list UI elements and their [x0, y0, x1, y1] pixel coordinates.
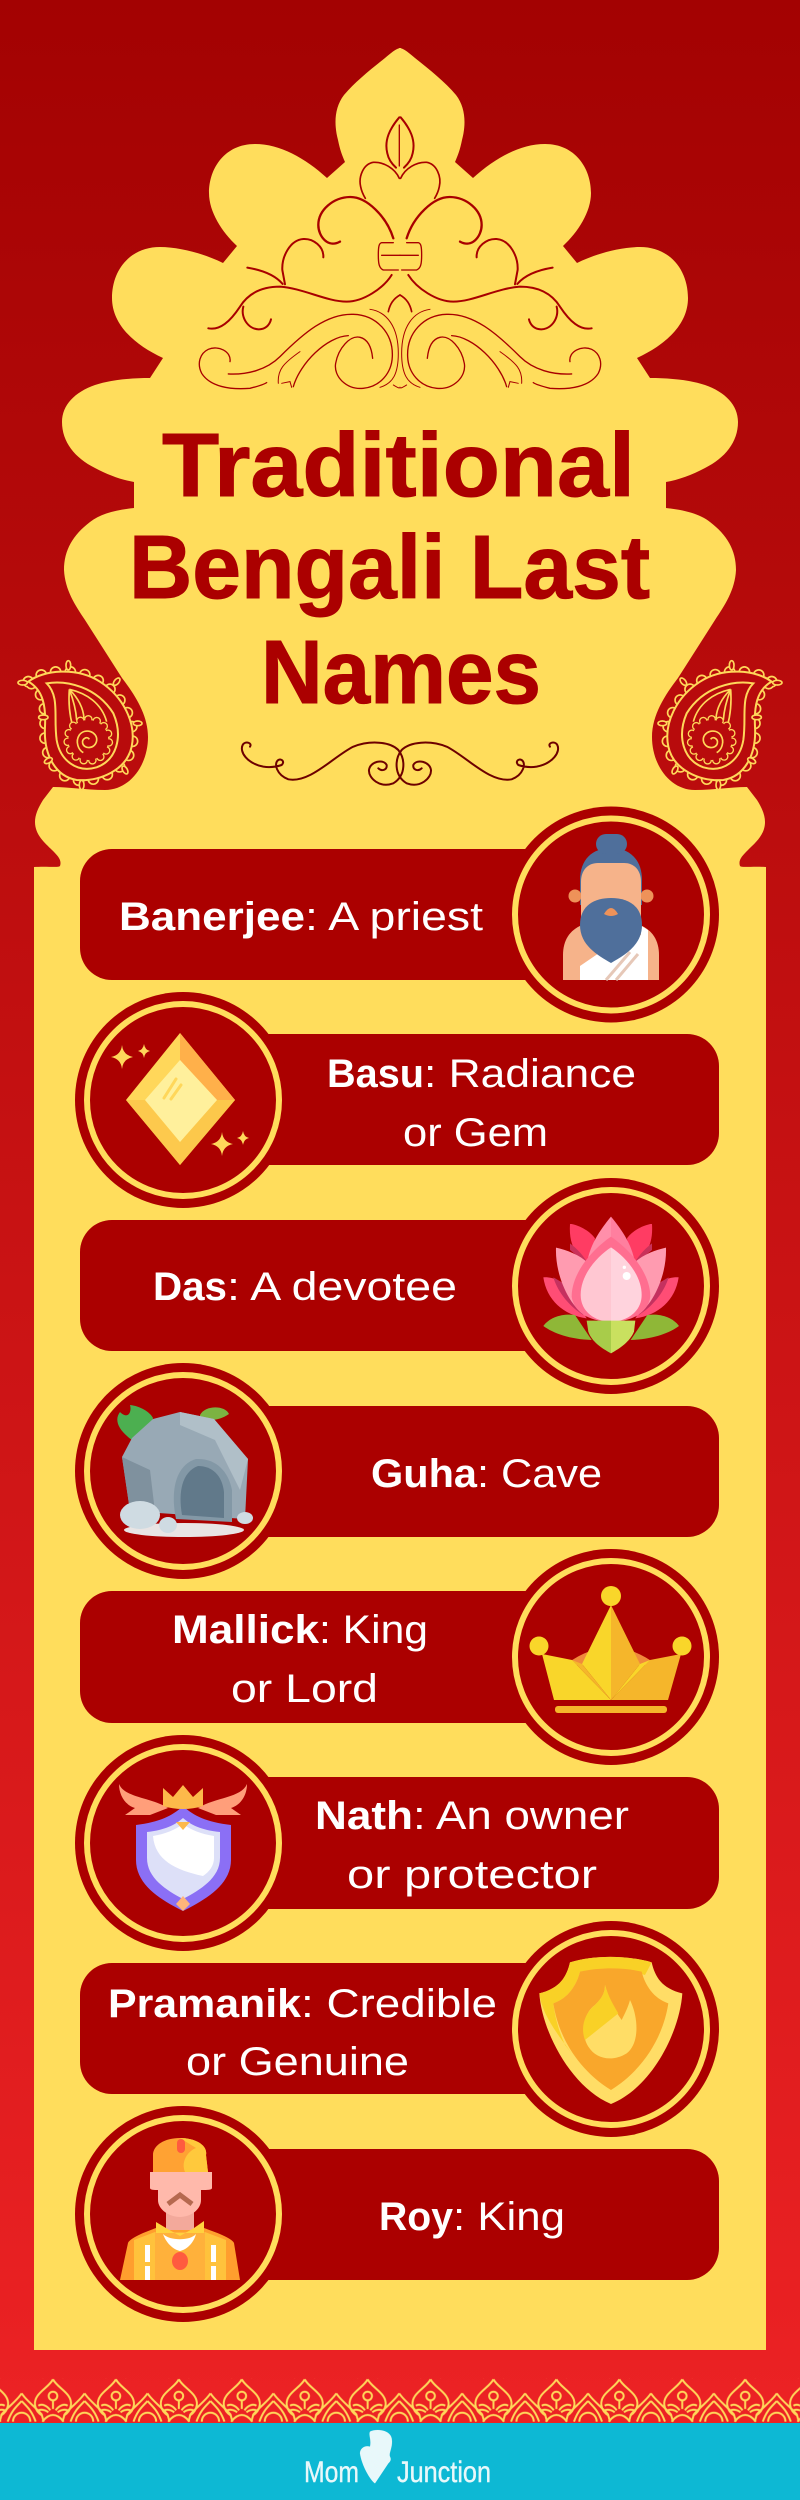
icon: king: [120, 2138, 240, 2280]
row: Pramanik: [80, 1921, 719, 2137]
text: : A devotee: [227, 1265, 457, 1309]
text: Basu: [327, 1052, 424, 1096]
text: or protector: [347, 1853, 597, 1897]
ornament: paisley left: [18, 661, 142, 790]
title: Traditional: [162, 416, 635, 516]
pill: [220, 1034, 719, 1165]
row: Guha: [75, 1363, 719, 1579]
text: [327, 1052, 636, 1155]
medallion: [503, 1921, 719, 2137]
text: Das: [153, 1265, 227, 1309]
ornament: title divider flourish: [242, 743, 558, 785]
text: Pramanik: [108, 1982, 302, 2026]
text: [371, 1452, 602, 1496]
text: Nath: [315, 1794, 413, 1838]
icon: shield with wings: [119, 1784, 247, 1911]
text: : King: [319, 1608, 428, 1652]
icon: crown: [530, 1586, 692, 1713]
footer band: [0, 2423, 800, 2500]
text: : King: [453, 2195, 565, 2239]
icon: priest: [563, 834, 659, 980]
text: [108, 1982, 497, 2084]
ornament: paisley right: [658, 661, 782, 790]
text: [153, 1265, 457, 1309]
pill: [80, 1963, 580, 2094]
ornament: top flourish: [199, 117, 601, 389]
text: [119, 895, 483, 939]
medallion: [503, 806, 719, 1022]
text: Banerjee: [119, 895, 305, 939]
text: or Lord: [231, 1667, 378, 1711]
text: or Genuine: [186, 2040, 409, 2084]
logo: MomJunction: Mom: [304, 2456, 359, 2489]
logo: MomJunction: [304, 2430, 491, 2489]
row: Mallick: [80, 1549, 719, 1765]
medallion: [75, 1735, 291, 1951]
text: Roy: [379, 2195, 454, 2239]
row: Nath: [75, 1735, 719, 1951]
row: Banerjee: [80, 806, 719, 1022]
icon: gem: [111, 1033, 249, 1165]
icon: lotus: [543, 1217, 679, 1353]
row: Roy: [75, 2106, 719, 2322]
text: or Gem: [403, 1111, 548, 1155]
pill: [220, 1406, 719, 1537]
text: [172, 1608, 428, 1711]
logo: MomJunction: Junction: [397, 2456, 491, 2489]
text: [379, 2195, 565, 2239]
pill: [80, 1220, 580, 1351]
text: Guha: [371, 1452, 478, 1496]
title: [129, 416, 650, 723]
row: Das: [80, 1178, 719, 1394]
icon: fire shield: [539, 1957, 682, 2104]
text: : Cave: [477, 1452, 602, 1496]
pill: [80, 1591, 580, 1723]
pill: [220, 1777, 719, 1909]
title: Bengali Last: [129, 518, 650, 618]
text: : Radiance: [424, 1052, 636, 1096]
pill: [80, 849, 580, 980]
text: Mallick: [172, 1608, 320, 1652]
text: [315, 1794, 629, 1897]
icon: cave: [117, 1405, 253, 1537]
decorative border band: [0, 2378, 800, 2422]
row: Basu: [75, 992, 719, 1208]
title: Names: [261, 623, 541, 723]
medallion: [75, 992, 291, 1208]
text: : A priest: [305, 895, 483, 939]
medallion: [75, 1363, 291, 1579]
medallion: [503, 1178, 719, 1394]
text: : An owner: [413, 1794, 629, 1838]
medallion: [503, 1549, 719, 1765]
medallion: [75, 2106, 291, 2322]
text: : Credible: [301, 1982, 497, 2026]
pill: [220, 2149, 719, 2280]
